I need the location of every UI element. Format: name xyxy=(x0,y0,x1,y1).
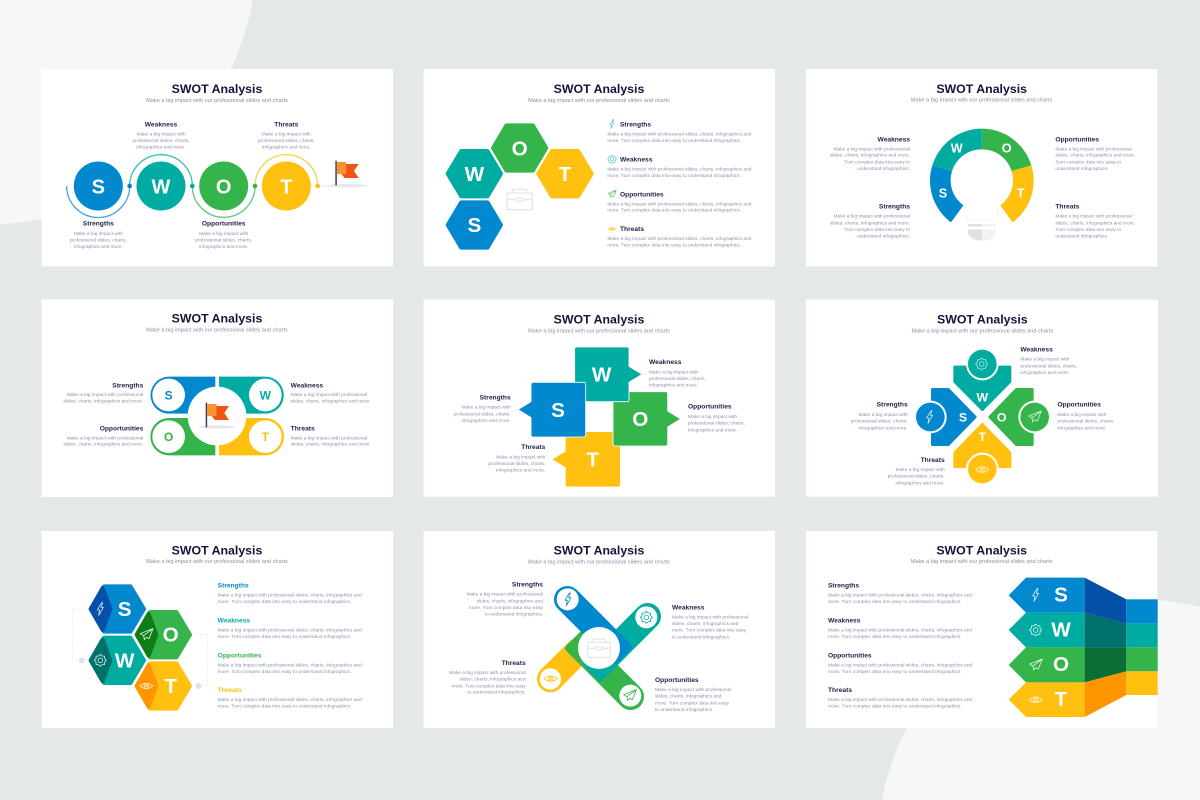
subtitle: Make a big impact with our professional slides and charts xyxy=(146,559,288,565)
hexagon O: O xyxy=(512,137,528,160)
text: opportunities: Make a big impact with xyxy=(1057,412,1107,418)
connector arcs xyxy=(67,155,337,217)
square W: W xyxy=(592,364,612,387)
bulb segment W xyxy=(932,129,982,171)
ribbon S: S xyxy=(1054,583,1068,606)
text: weakness: infographics and more. xyxy=(649,383,698,389)
center circle xyxy=(188,387,246,445)
slide card xyxy=(806,69,1157,266)
text: weakness xyxy=(607,156,752,179)
slide card xyxy=(424,531,775,728)
text: weakness: Make a big impact with professional xyxy=(834,146,910,152)
text: weakness xyxy=(830,136,910,172)
text: opportunities: Opportunities xyxy=(828,652,872,659)
hexagon T xyxy=(538,151,592,196)
title: SWOT Analysis xyxy=(936,82,1027,96)
text: weakness xyxy=(133,121,189,151)
text: opportunities: Make a big impact with professional slides, charts, infographics and xyxy=(218,662,362,668)
text: strengths: Make a big impact with professional xyxy=(467,592,543,598)
bulb segment O xyxy=(982,129,1031,171)
hexagon S: S xyxy=(118,598,132,621)
icon: flag xyxy=(199,403,235,429)
arrow O: O xyxy=(997,410,1007,424)
text: weakness: Make a big impact with xyxy=(1020,357,1070,363)
ribbon O: O xyxy=(1053,653,1069,676)
subtitle: Make a big impact with our professional slides and charts xyxy=(911,328,1054,334)
hexagon T: T xyxy=(559,163,572,186)
pill W xyxy=(219,377,284,414)
text: opportunities: Opportunities xyxy=(100,425,144,432)
text: weakness: Make a big impact with xyxy=(649,369,698,375)
text: threats: Threats xyxy=(502,660,526,667)
text: strengths: to understand infographics. xyxy=(485,612,543,618)
text: opportunities: Opportunities xyxy=(620,191,664,198)
text: opportunities: Make a big impact with professional slides, charts, infographics and xyxy=(828,662,972,668)
bulb segment T xyxy=(1000,165,1034,222)
text: weakness: Make a big impact with professional slides, charts, infographics and xyxy=(828,628,972,634)
connector dots xyxy=(79,657,201,689)
ribbon O xyxy=(1009,647,1158,682)
hexagon O: O xyxy=(163,624,179,647)
arrow S xyxy=(932,389,975,445)
text: weakness: Weakness xyxy=(291,382,323,389)
ribbon T: T xyxy=(1055,688,1068,711)
text: threats xyxy=(449,660,526,696)
icon: flag xyxy=(327,161,367,187)
text: threats: slides, charts, infographics and more. xyxy=(1055,220,1135,226)
text: weakness: more. Turn complex data into easy to understand infographics. xyxy=(828,634,962,640)
text: strengths xyxy=(70,221,127,250)
text: strengths xyxy=(218,583,362,605)
hexagon W xyxy=(91,638,144,683)
strengths circle xyxy=(74,161,123,210)
text: opportunities xyxy=(828,652,972,675)
text: weakness: slides, charts, infographics and more. xyxy=(291,399,371,405)
text: opportunities xyxy=(655,677,731,713)
text: weakness: understand infographics. xyxy=(857,166,910,172)
text: threats: Threats xyxy=(828,687,852,694)
text: weakness: Weakness xyxy=(620,156,653,163)
text: threats xyxy=(218,687,362,710)
text: opportunities: slides, charts, infographics and more. xyxy=(1055,153,1135,159)
pill: weakness xyxy=(583,603,661,681)
text: threats: Threats xyxy=(291,425,315,432)
square T xyxy=(553,432,620,487)
text: opportunities: Opportunities xyxy=(218,652,262,659)
panel 9: ribbons xyxy=(806,531,1158,728)
text: strengths: more. Turn complex data into easy to understand infographics. xyxy=(828,599,962,605)
text: weakness: Make a big impact with xyxy=(136,132,186,138)
text: strengths: Strengths xyxy=(480,395,511,402)
pill W: W xyxy=(260,388,272,402)
text: threats: more. Turn complex data into easy to understand infographics. xyxy=(607,243,741,249)
pill: threats xyxy=(537,639,590,692)
arrow O xyxy=(990,389,1032,445)
icon: plane xyxy=(608,190,616,197)
text: strengths xyxy=(828,583,972,605)
text: weakness: Weakness xyxy=(145,121,178,128)
text: threats: Threats xyxy=(521,444,546,451)
text: opportunities: Opportunities xyxy=(688,404,732,411)
text: strengths xyxy=(467,582,544,618)
bulb segment S: S xyxy=(939,187,947,201)
text: opportunities: slides, charts, infographics and xyxy=(655,694,722,700)
hexagon W: W xyxy=(465,163,485,186)
text: threats: Threats xyxy=(921,457,945,464)
title: SWOT Analysis xyxy=(554,312,645,326)
ribbon S xyxy=(1009,578,1158,624)
subtitle: Make a big impact with our professional slides and charts xyxy=(528,98,670,104)
square T: T xyxy=(586,449,599,472)
subtitle: Make a big impact with our professional slides and charts xyxy=(911,559,1053,565)
text: threats xyxy=(607,226,752,249)
text: threats: professional slides, charts, xyxy=(888,474,945,480)
panel 3: light bulb xyxy=(806,69,1157,266)
text: weakness: Weakness xyxy=(649,359,682,366)
strengths circle: S xyxy=(92,176,105,198)
hexagon T xyxy=(137,663,190,709)
text: threats xyxy=(828,687,972,710)
subtitle: Make a big impact with our professional slides and charts xyxy=(146,327,288,333)
panel 1: circles timeline xyxy=(41,69,393,266)
text: weakness: Weakness xyxy=(672,604,705,611)
text: opportunities: infographics and more. xyxy=(688,427,737,433)
text: threats: Make a big impact with professional xyxy=(449,670,526,676)
text: threats: Threats xyxy=(1055,204,1080,211)
text: threats: Make a big impact with xyxy=(262,132,311,138)
panel 2: honeycomb xyxy=(424,69,775,266)
text: opportunities: infographics and more. xyxy=(199,244,248,250)
text: threats xyxy=(488,444,546,474)
hexagon W xyxy=(448,151,501,196)
slide card xyxy=(806,300,1158,497)
text: opportunities: more. Turn complex data into easy xyxy=(655,700,730,706)
text: weakness xyxy=(672,604,748,640)
text: opportunities: professional slides, charts, xyxy=(195,237,252,243)
icon circle: plane xyxy=(1018,401,1051,433)
title: SWOT Analysis xyxy=(554,82,645,96)
text: strengths: infographics and more. xyxy=(74,244,123,250)
text: strengths: Strengths xyxy=(877,402,908,409)
text: weakness: to understand infographics. xyxy=(672,634,730,640)
text: opportunities: Turn complex data into easy to xyxy=(1055,159,1121,165)
text: threats: infographics and more. xyxy=(262,145,311,151)
hexagon S xyxy=(91,586,144,632)
text: threats: infographics and more. xyxy=(496,468,545,474)
text: strengths: professional slides, charts, xyxy=(454,411,511,417)
hexagon T: T xyxy=(164,675,177,698)
title: SWOT Analysis xyxy=(172,543,263,557)
hexagon O xyxy=(137,612,190,657)
bulb base xyxy=(966,206,998,241)
title: SWOT Analysis xyxy=(172,312,263,326)
text: threats: Threats xyxy=(218,687,242,694)
text: weakness: Weakness xyxy=(828,617,861,624)
text: weakness: professional slides, charts, xyxy=(1020,363,1077,369)
hexagon W: W xyxy=(115,649,135,672)
text: strengths: more. Turn complex data into easy to understand infographics. xyxy=(607,138,741,144)
text: opportunities: professional slides, charts, xyxy=(1057,419,1114,425)
connector dots xyxy=(127,184,320,188)
icon: eye xyxy=(608,227,616,231)
pill O xyxy=(150,418,215,455)
slide card xyxy=(424,69,775,266)
text: weakness: Weakness xyxy=(1020,346,1053,353)
text: opportunities: more. Turn complex data into easy to understand infographics. xyxy=(218,669,351,675)
subtitle: Make a big impact with our professional slides and charts xyxy=(528,559,670,565)
title: SWOT Analysis xyxy=(172,82,263,96)
panel 8: crossed pills xyxy=(424,531,775,728)
text: opportunities: infographics and more. xyxy=(1057,425,1106,431)
text: weakness: infographics and more. xyxy=(1020,370,1069,376)
text: weakness: more. Turn complex data into easy to understand infographics. xyxy=(607,173,741,179)
text: weakness: Weakness xyxy=(878,136,910,143)
text: threats: Make a big impact with professional xyxy=(291,435,367,441)
text: opportunities: Make a big impact with professional xyxy=(1055,146,1132,152)
text: strengths xyxy=(830,204,910,240)
text: threats: Make a big impact with professional slides, charts, infographics and xyxy=(218,697,362,703)
slide card xyxy=(41,69,393,266)
text: weakness: Make a big impact with professional slides, charts, infographics and xyxy=(218,628,362,634)
text: threats xyxy=(1055,204,1135,240)
text: weakness xyxy=(291,382,371,405)
icon circle: bolt xyxy=(914,401,947,433)
text: strengths: Make a big impact with professional slides, charts, infographics and xyxy=(607,132,752,138)
pill S xyxy=(150,377,215,414)
panel 6: four arrows xyxy=(806,300,1158,497)
slide card xyxy=(41,299,393,497)
panel 5: puzzle squares xyxy=(424,300,775,497)
text: strengths: Turn complex data into easy to xyxy=(844,227,910,233)
title: SWOT Analysis xyxy=(554,543,645,557)
text: strengths xyxy=(851,402,908,431)
text: strengths xyxy=(63,382,144,405)
text: opportunities: to understand infographics. xyxy=(655,707,713,713)
text: strengths: understand infographics. xyxy=(857,234,910,240)
text: opportunities xyxy=(63,425,144,448)
text: strengths: slides, charts, infographics and more. xyxy=(830,220,910,226)
text: strengths: more. Turn complex data into easy xyxy=(469,605,544,611)
threats circle xyxy=(262,161,311,210)
text: threats: more. Turn complex data into easy xyxy=(452,683,526,689)
text: threats: Make a big impact with professional xyxy=(1055,214,1132,220)
icon: target xyxy=(608,155,616,164)
text: strengths: infographics and more. xyxy=(859,425,908,431)
text: strengths: Make a big impact with xyxy=(462,405,511,411)
text: opportunities: Opportunities xyxy=(1055,136,1099,143)
text: weakness: professional slides, charts, xyxy=(133,138,189,144)
background blob: bottom right xyxy=(882,597,1200,800)
text: strengths: Make a big impact with professional xyxy=(834,214,910,220)
text: strengths: professional slides, charts, xyxy=(70,237,127,243)
arrow S: S xyxy=(959,410,967,424)
icon: bolt xyxy=(610,120,614,128)
text: weakness xyxy=(1020,346,1077,376)
bulb segment T: T xyxy=(1017,187,1025,201)
ribbon W: W xyxy=(1051,618,1071,641)
background blob: top left xyxy=(0,0,253,224)
text: strengths: Make a big impact with professional slides, charts, infographics and xyxy=(828,593,972,599)
ribbon W xyxy=(1009,613,1158,647)
icon circle: eye xyxy=(966,453,999,485)
text: threats: understand infographics. xyxy=(1055,234,1108,240)
text: opportunities: professional slides, charts, xyxy=(688,421,745,427)
title: SWOT Analysis xyxy=(936,543,1027,557)
text: opportunities: Make a big impact with xyxy=(688,414,737,420)
text: threats: more. Turn complex data into easy to understand infographics. xyxy=(218,704,351,710)
text: opportunities: Opportunities xyxy=(655,677,699,684)
text: weakness xyxy=(218,617,362,640)
text: opportunities xyxy=(195,221,252,250)
text: opportunities: Opportunities xyxy=(1057,402,1101,409)
text: opportunities xyxy=(688,404,745,433)
pill T: T xyxy=(262,430,270,444)
text: strengths: Make a big impact with xyxy=(859,412,908,418)
text: weakness: more. Turn complex data into easy to understand infographics. xyxy=(218,634,351,640)
text: weakness: Make a big impact with professional xyxy=(672,614,748,620)
arrow W: W xyxy=(977,391,989,405)
text: threats: professional slides, charts, xyxy=(488,461,545,467)
text: strengths: Make a big impact with professional xyxy=(67,392,143,398)
panel 4: pills with flag xyxy=(41,299,393,497)
text: threats: professional slides, charts, xyxy=(258,138,315,144)
pill O: O xyxy=(164,430,173,444)
dashed connectors xyxy=(72,609,208,686)
text: strengths: slides, charts, infographics and more. xyxy=(63,399,143,405)
text: weakness: slides, charts, infographics and more. xyxy=(830,153,910,159)
text: opportunities: Make a big impact with professional xyxy=(655,687,731,693)
bulb segment S xyxy=(930,165,963,222)
text: opportunities: Make a big impact with professional xyxy=(67,435,143,441)
text: opportunities: more. Turn complex data into easy to understand infographics. xyxy=(828,669,962,675)
text: threats xyxy=(291,425,371,448)
text: strengths: Strengths xyxy=(620,121,651,128)
subtitle: Make a big impact with our professional slides and charts xyxy=(911,98,1053,104)
text: weakness: infographics and more. xyxy=(136,145,186,151)
text: strengths: Strengths xyxy=(879,204,910,211)
icon circle: gear xyxy=(966,348,999,380)
text: weakness xyxy=(828,617,972,640)
arrow W xyxy=(955,367,1010,410)
square S: S xyxy=(551,399,565,422)
slide card xyxy=(806,531,1157,728)
text: opportunities: Make a big impact with xyxy=(199,231,249,237)
text: weakness: slides, charts, infographics and xyxy=(672,621,739,627)
title: SWOT Analysis xyxy=(937,312,1028,326)
pill T xyxy=(219,418,284,455)
text: opportunities: Make a big impact with professional slides, charts, infographics and xyxy=(607,201,752,207)
text: threats xyxy=(258,121,315,151)
text: weakness: Make a big impact with professional xyxy=(291,392,367,398)
pill: strengths xyxy=(554,586,632,664)
text: opportunities: more. Turn complex data into easy to understand infographics. xyxy=(607,208,741,214)
text: threats: Make a big impact with professional slides, charts, infographics and xyxy=(607,236,752,242)
bulb segment W: W xyxy=(951,142,963,156)
square O xyxy=(613,392,681,446)
weakness circle: W xyxy=(152,176,171,198)
hexagon S: S xyxy=(467,214,481,237)
text: threats: more. Turn complex data into easy to understand infographics. xyxy=(828,704,962,710)
text: opportunities: understand infographics. xyxy=(1055,166,1108,172)
text: strengths: Strengths xyxy=(112,382,144,389)
text: opportunities: slides, charts, infographics and more. xyxy=(63,442,143,448)
text: threats: Threats xyxy=(620,226,644,233)
text: strengths xyxy=(454,395,511,424)
arrow T: T xyxy=(979,430,987,444)
text: weakness: Turn complex data into easy to xyxy=(844,159,910,165)
text: strengths: Make a big impact with professional slides, charts, infographics and xyxy=(218,593,362,599)
text: strengths xyxy=(607,121,752,144)
text: strengths: Make a big impact with xyxy=(74,231,123,237)
icon: briefcase xyxy=(507,189,532,210)
text: weakness: Make a big impact with professional slides, charts, infographics and xyxy=(607,166,752,172)
text: strengths: Strengths xyxy=(218,583,249,590)
text: threats: slides, charts, infographics and more. xyxy=(291,442,371,448)
text: weakness: more. Turn complex data into easy xyxy=(672,628,747,634)
text: strengths: professional slides, charts, xyxy=(851,419,908,425)
text: opportunities xyxy=(218,652,362,675)
center circle with briefcase xyxy=(578,627,620,669)
text: opportunities xyxy=(1055,136,1135,172)
text: strengths: Strengths xyxy=(512,582,543,589)
square O: O xyxy=(632,408,648,431)
hexagon O xyxy=(493,125,546,171)
square S xyxy=(518,382,586,437)
text: threats xyxy=(888,457,945,486)
slide card xyxy=(424,300,775,497)
text: threats: infographics and more. xyxy=(896,480,945,486)
text: strengths: infographics and more. xyxy=(462,418,511,424)
text: weakness: Weakness xyxy=(218,617,250,624)
text: strengths: Strengths xyxy=(828,583,859,590)
text: weakness xyxy=(649,359,706,389)
opportunities circle xyxy=(199,161,248,210)
opportunities circle: O xyxy=(216,176,231,198)
text: threats: to understand infographics. xyxy=(467,690,526,696)
subtitle: Make a big impact with our professional slides and charts xyxy=(146,98,288,104)
text: threats: Threats xyxy=(274,121,299,128)
pill: opportunities xyxy=(565,631,644,710)
bulb segment O: O xyxy=(1002,142,1012,156)
text: opportunities xyxy=(607,191,752,214)
text: strengths: Strengths xyxy=(83,221,114,228)
weakness circle xyxy=(136,161,185,210)
text: threats: Turn complex data into easy to xyxy=(1055,227,1121,233)
text: threats: slides, charts, infographics and xyxy=(459,677,526,683)
slide card xyxy=(41,531,393,728)
text: threats: Make a big impact with xyxy=(496,454,546,460)
ribbon T xyxy=(1009,671,1158,717)
subtitle: Make a big impact with our professional slides and charts xyxy=(528,328,670,334)
text: strengths: more. Turn complex data into easy to understand infographics. xyxy=(218,599,351,605)
text: weakness: professional slides, charts, xyxy=(649,376,706,382)
text: opportunities xyxy=(1057,402,1114,431)
arrow T xyxy=(955,424,1010,467)
pill S: S xyxy=(165,388,173,402)
text: opportunities: Opportunities xyxy=(202,221,246,228)
hexagon S xyxy=(448,202,501,248)
square W xyxy=(575,347,642,402)
text: threats: Make a big impact with xyxy=(896,467,945,473)
text: strengths: slides, charts, infographics and xyxy=(477,598,543,604)
text: threats: Make a big impact with professional slides, charts, infographics and xyxy=(828,697,972,703)
panel 7: hexagon cluster xyxy=(41,531,393,728)
threats circle: T xyxy=(280,176,292,198)
